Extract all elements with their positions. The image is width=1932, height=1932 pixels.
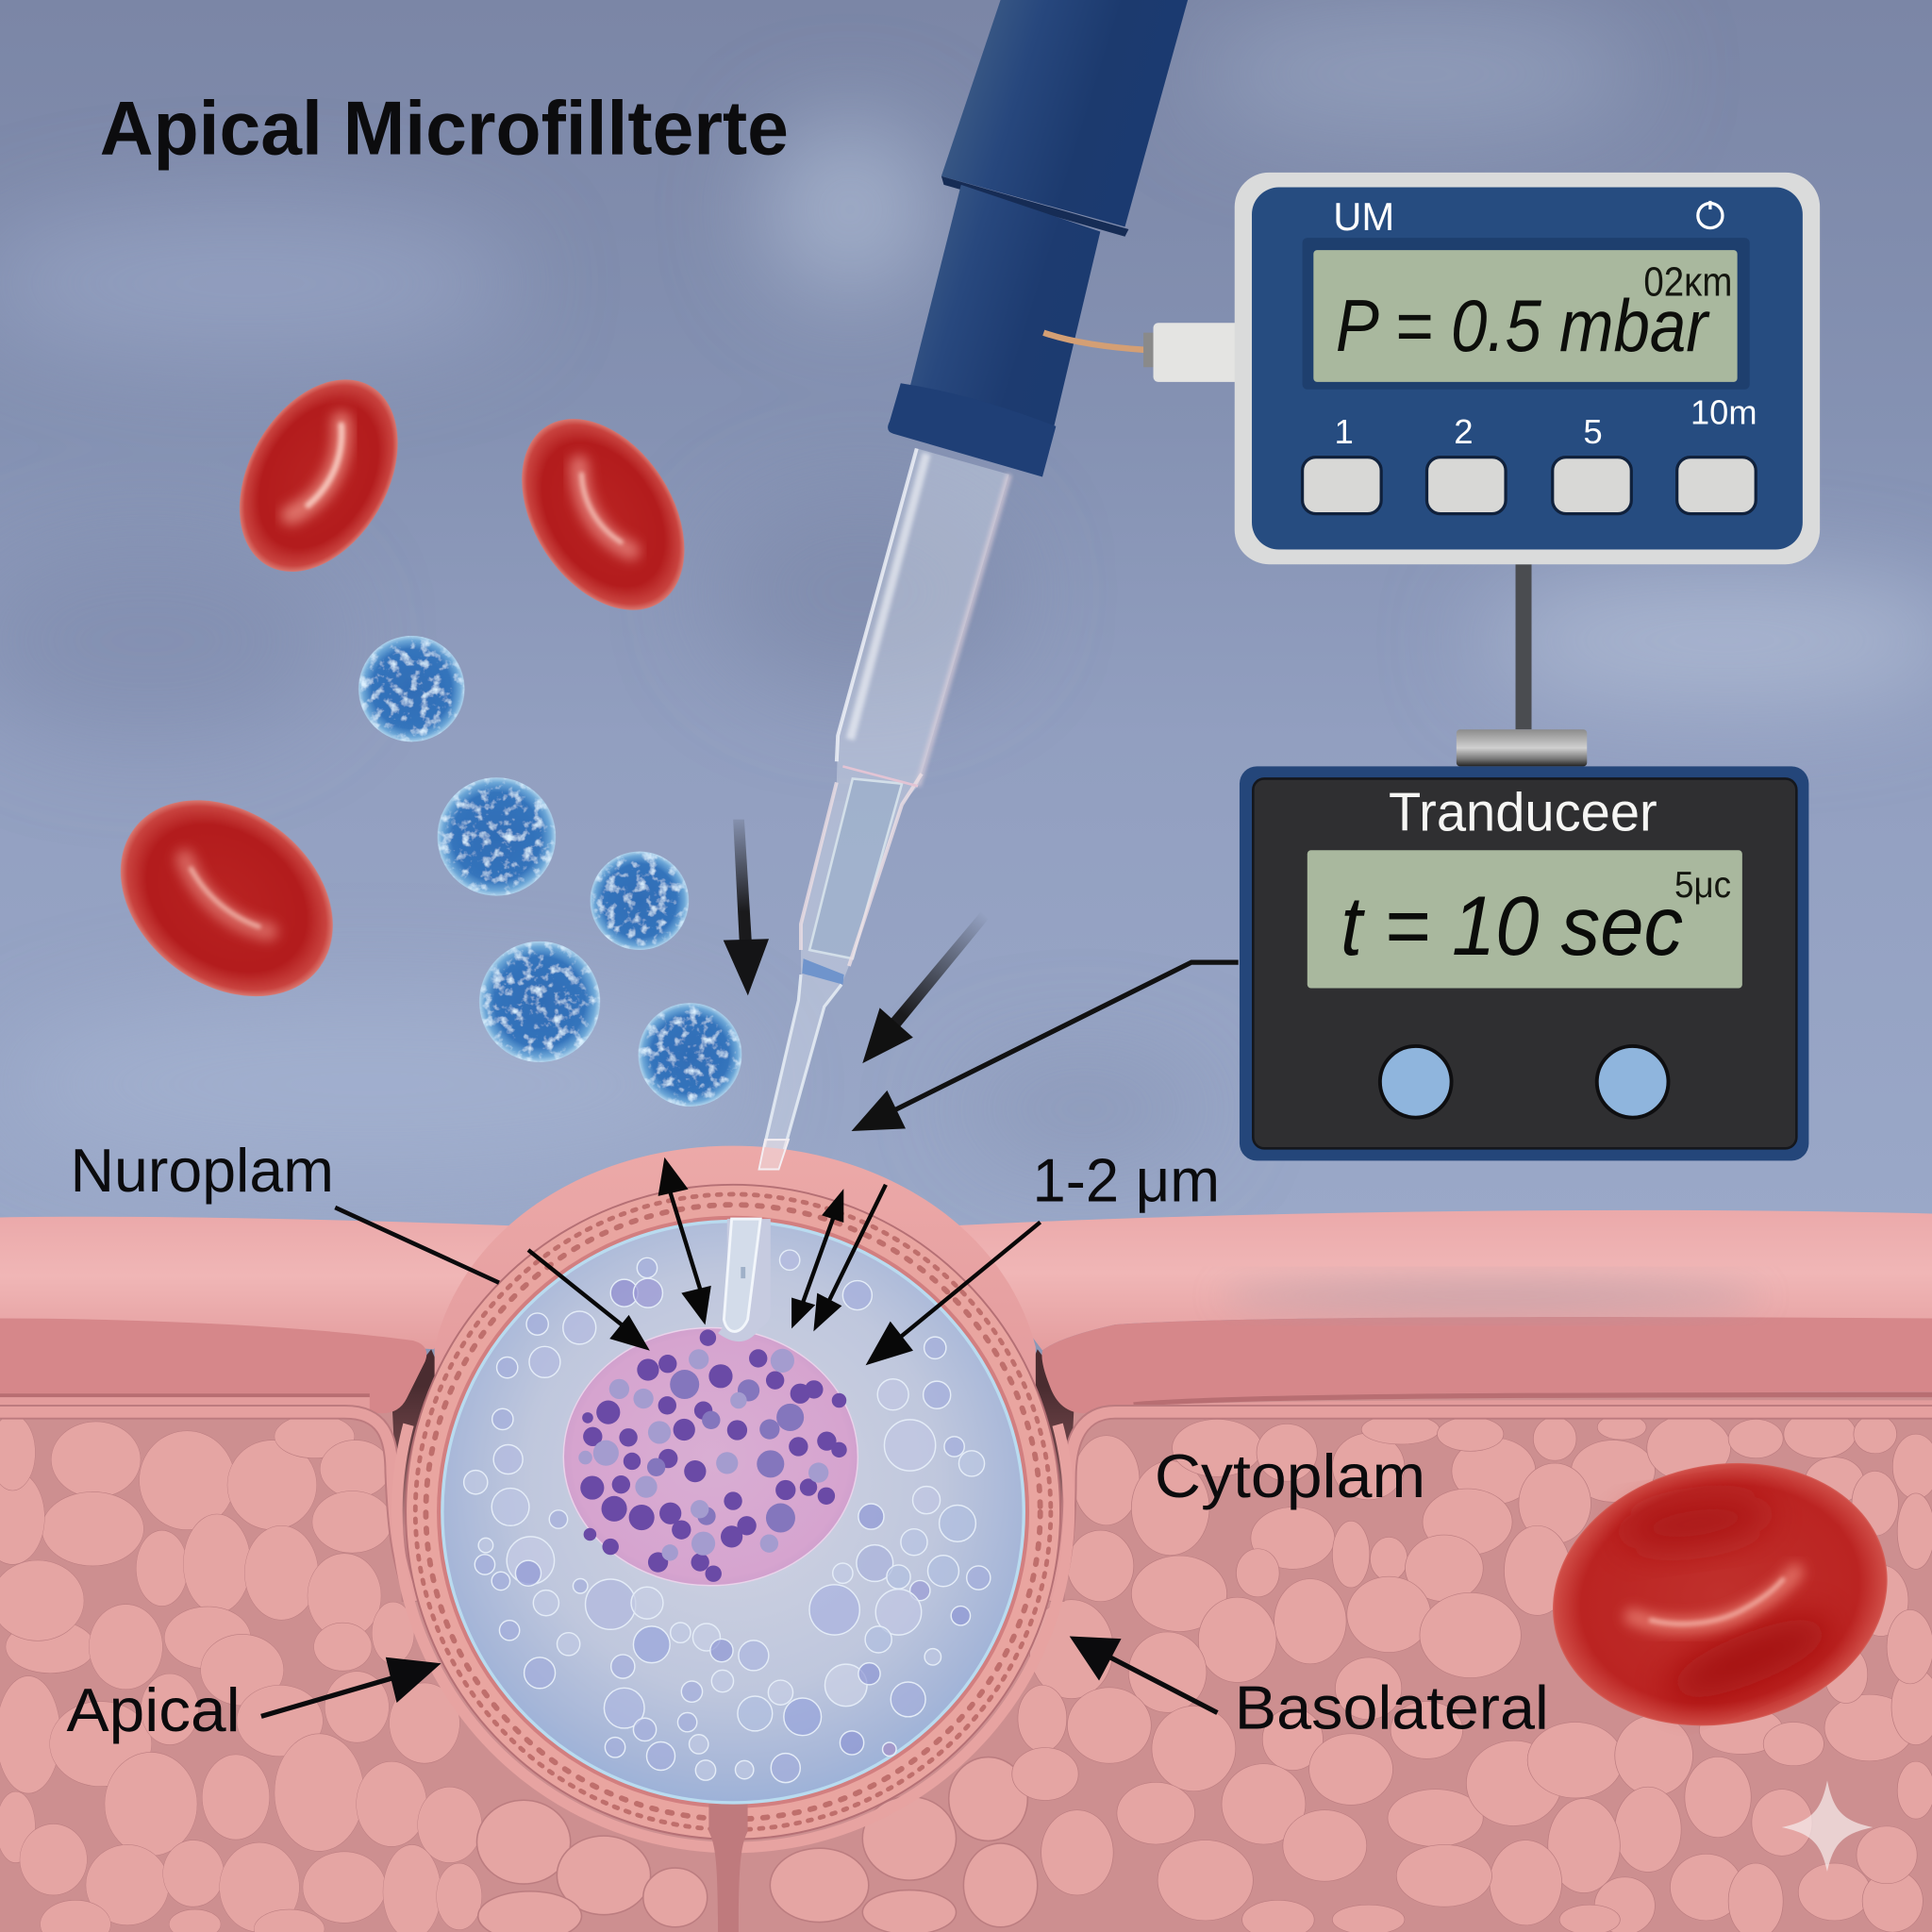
pressure reading: P = 0.5 mbar bbox=[1336, 284, 1710, 367]
outer membrane strip bbox=[397, 1424, 1069, 1847]
red blood cell, lower right bbox=[1528, 1433, 1912, 1756]
double arrow to nucleus top bbox=[658, 1158, 711, 1325]
arrow: Basolateral bbox=[1070, 1637, 1217, 1713]
arrow from 1-2 µm label bbox=[866, 1223, 1041, 1365]
button labels: 1 bbox=[1335, 412, 1354, 451]
label: 1-2 µm: 1-2 μm bbox=[1033, 1145, 1220, 1214]
transducer title: Tranduceer bbox=[1389, 782, 1657, 842]
bottom cleft in wall bbox=[708, 1804, 748, 1932]
band shadow, right bbox=[1220, 1281, 1762, 1311]
transducer device bbox=[1240, 766, 1808, 1160]
nucleus bbox=[563, 1327, 858, 1586]
double arrow right of tip bbox=[791, 1189, 843, 1328]
collar bbox=[888, 383, 1056, 476]
button labels: 5 bbox=[1583, 412, 1603, 451]
sensor wire bbox=[1043, 333, 1146, 350]
leader line: Nuroplam bbox=[335, 1208, 499, 1283]
transducer buttons bbox=[1380, 1046, 1452, 1118]
button labels: 2 bbox=[1454, 412, 1474, 451]
pressure meter device bbox=[1235, 173, 1820, 564]
meter small reading: 02κm bbox=[1643, 259, 1732, 305]
upper tissue band, left bbox=[0, 1217, 518, 1413]
pipette tip inside cell bbox=[718, 1219, 771, 1341]
connector rod between devices bbox=[1516, 564, 1532, 729]
lower tissue with cells bbox=[0, 1392, 1932, 1932]
white blood cells cluster bbox=[358, 636, 741, 1107]
cell wall bbox=[406, 1185, 1060, 1840]
arrow: vertical above cell bbox=[724, 820, 769, 995]
lower barrel bbox=[908, 185, 1100, 434]
red blood cell, left bbox=[82, 759, 371, 1037]
red blood cell, top centre bbox=[489, 389, 718, 640]
arrow right of tip bbox=[813, 1185, 886, 1331]
button labels bbox=[1335, 392, 1757, 451]
label: Apical: Apical bbox=[67, 1675, 241, 1744]
cytoplasm bbox=[442, 1222, 1024, 1803]
icon: sparkle watermark bbox=[1782, 1780, 1873, 1872]
upper tissue band, right bbox=[949, 1210, 1932, 1413]
pipette tip resting on dome bbox=[759, 1140, 789, 1170]
label: Cytoplam: Cytoplam bbox=[1155, 1441, 1425, 1510]
title: Apical Microfillterte bbox=[100, 86, 789, 171]
nucleus granules bbox=[580, 1329, 847, 1582]
vesicles bbox=[464, 1250, 991, 1783]
arrow: Apical bbox=[261, 1657, 441, 1716]
meter buttons bbox=[1303, 458, 1756, 514]
cable from meter to pipette bbox=[1143, 323, 1240, 382]
meter icon bbox=[1698, 201, 1723, 228]
pipette bbox=[759, 0, 1188, 1170]
glass tube bbox=[759, 448, 1009, 1170]
arrow: diagonal above cell bbox=[862, 912, 989, 1063]
crease shadows beside cell bbox=[391, 1349, 1074, 1602]
transducer small reading: 5μc bbox=[1674, 865, 1731, 906]
time reading: t = 10 sec bbox=[1341, 879, 1683, 973]
background: blurred blue-grey sky bbox=[0, 0, 1932, 1232]
inner wall rim bbox=[437, 1216, 1029, 1808]
arrow into nucleus bbox=[528, 1250, 650, 1351]
membrane lines around cell bbox=[0, 1412, 1932, 1602]
red blood cell, top left bbox=[208, 352, 430, 600]
connector cap bbox=[1457, 729, 1587, 766]
flange bbox=[941, 176, 1128, 237]
pores in wall bbox=[415, 1194, 1051, 1830]
cell dome: all coordinates inside this group use a local scale bbox=[397, 1146, 1069, 1932]
label: Nuroplam: Nuroplam bbox=[70, 1136, 334, 1205]
arrow: from transducer bbox=[852, 962, 1239, 1131]
button labels: 10m bbox=[1690, 392, 1757, 431]
label: Basolateral: Basolateral bbox=[1235, 1673, 1549, 1741]
meter label: UM bbox=[1333, 194, 1394, 239]
dome cover bbox=[435, 1146, 1036, 1407]
upper barrel bbox=[941, 0, 1188, 226]
